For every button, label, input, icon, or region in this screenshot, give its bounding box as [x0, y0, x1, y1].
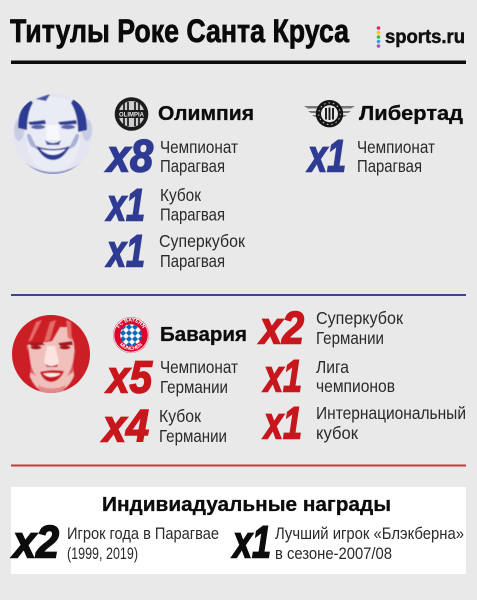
award: Blackburn best player: [231, 516, 464, 568]
title row: x2 supercup: [258, 302, 403, 354]
title row: x1 supercup: x1: [105, 226, 145, 276]
icon: Bayern crest: FC BAYERN: [116, 318, 146, 328]
title row: x5 league: Германии: [160, 377, 228, 397]
title row: x2 supercup: Германии: [316, 328, 384, 348]
award: Blackburn best player: x1: [231, 516, 271, 568]
title row: x8 league: Парагвая: [160, 156, 225, 176]
title row: x4 cup: Кубок: [159, 406, 201, 426]
title row: x1 cup: Кубок: [160, 185, 201, 205]
title row: x2 supercup: x2: [258, 302, 304, 354]
club name: Бавария: [160, 324, 247, 346]
title row: x1 cup: [105, 180, 225, 230]
club: Bayern: [113, 317, 247, 353]
title row: x1 champions league: [262, 350, 395, 402]
club: Olimpia: [115, 97, 254, 131]
award: player of the year: Игрок года в Парагвае: [67, 524, 219, 543]
title row: x8 league: x8: [105, 130, 153, 182]
title row: x5 league: Чемпионат: [160, 357, 238, 377]
title row: x1 Libertad league: [306, 130, 435, 182]
divider: red: [11, 464, 466, 466]
portrait: red: [12, 315, 90, 394]
awards heading: Индивиадуальные награды: [102, 494, 391, 516]
title row: x1 Libertad league: Чемпионат: [357, 137, 435, 157]
club name: Олимпия: [158, 103, 254, 125]
title row: x1 Libertad league: Парагвая: [357, 156, 422, 176]
title row: x1 supercup: Суперкубок: [159, 231, 245, 251]
icon: Olimpia crest: OLIMPIA: [119, 112, 145, 118]
title row: x1 Libertad league: x1: [306, 130, 346, 182]
title row: x8 league: [105, 130, 238, 182]
title row: x5 league: [105, 352, 238, 402]
icon: Libertad crest: [304, 100, 355, 127]
title row: x1 intercontinental cup: кубок: [316, 423, 358, 443]
title row: x4 cup: x4: [101, 400, 149, 452]
award: player of the year: [11, 516, 219, 568]
title row: x1 champions league: Лига: [316, 357, 349, 377]
title row: x8 league: Чемпионат: [160, 137, 238, 157]
award: Blackburn best player: в сезоне-2007/08: [275, 544, 392, 563]
award: player of the year: (1999, 2019): [67, 544, 138, 563]
award: player of the year: x2: [11, 516, 59, 568]
title row: x1 supercup: [105, 226, 245, 276]
header rule: [11, 60, 466, 64]
portrait: blue: [13, 94, 93, 175]
logo: sports.ru: sports.ru: [385, 27, 465, 48]
panel: individual awards: [11, 487, 466, 574]
title row: x1 cup: Парагвая: [160, 204, 225, 224]
title row: x1 supercup: Парагвая: [160, 251, 225, 271]
club: Libertad: [304, 100, 463, 127]
title row: x2 supercup: Суперкубок: [316, 308, 403, 328]
title row: x1 cup: x1: [105, 180, 145, 230]
title row: x4 cup: Германии: [159, 426, 227, 446]
title: Титулы Роке Санта Круса: [10, 13, 349, 49]
divider: blue: [11, 294, 466, 296]
title row: x4 cup: [101, 400, 227, 452]
icon: Bayern crest: [113, 317, 149, 353]
title row: x1 champions league: x1: [262, 350, 302, 402]
club name: Либертад: [359, 103, 463, 125]
panel: Paraguay clubs: [13, 94, 463, 276]
panel: Bayern: [12, 302, 466, 452]
title row: x1 intercontinental cup: x1: [262, 398, 302, 448]
title row: x1 intercontinental cup: [262, 398, 466, 448]
title row: x1 champions league: чемпионов: [316, 376, 395, 396]
title row: x5 league: x5: [105, 352, 153, 402]
icon: Bayern crest: MÜNCHEN: [120, 342, 142, 350]
